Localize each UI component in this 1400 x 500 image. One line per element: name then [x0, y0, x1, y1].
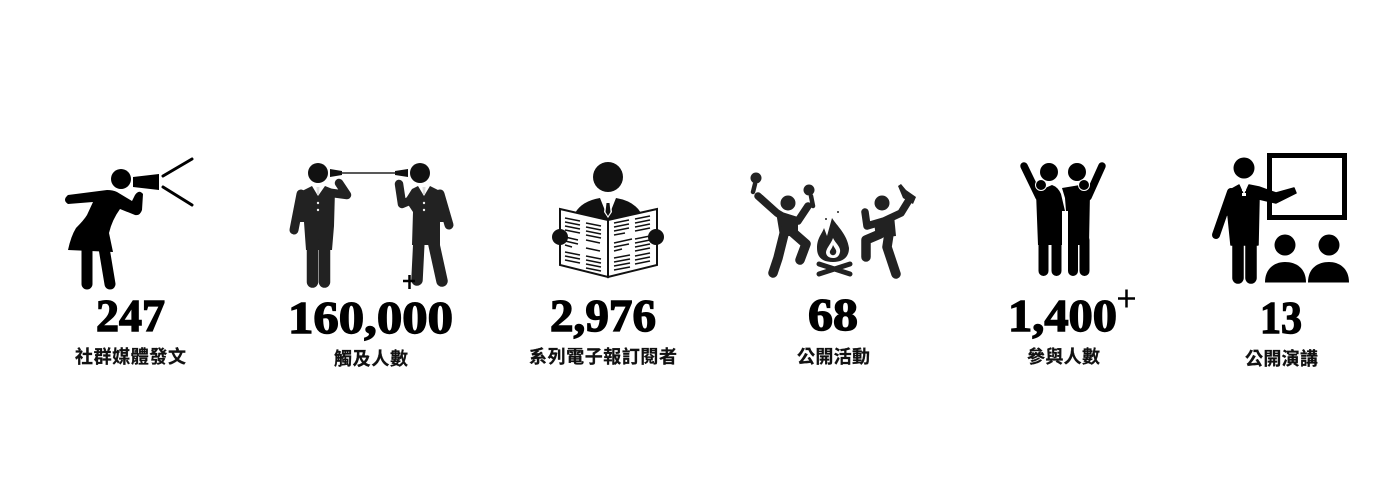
label: talks: 公開演講 [1245, 348, 1318, 369]
icon: two men with tin can phone [294, 163, 449, 289]
stat: social media posts [65, 159, 192, 367]
stat: reach [288, 163, 453, 369]
label: events: 公開活動 [797, 347, 870, 367]
number: 247: 247 [96, 290, 165, 341]
label: posts: 社群媒體發文 [75, 346, 186, 367]
icon: man reading newspaper [552, 162, 664, 277]
number: 13: 13 [1260, 292, 1302, 343]
icon: two people with raised arms [1024, 163, 1102, 271]
number: 68: 68 [808, 289, 858, 340]
icon: woman with megaphone [65, 159, 192, 284]
stat: public events [750, 172, 916, 367]
label: participants: 參與人數 [1027, 346, 1100, 367]
number: 160,000: 160,000 [288, 292, 453, 343]
stat: newsletter subscribers [529, 162, 677, 367]
stat: participants [1008, 163, 1135, 367]
label: reach: 觸及人數 [334, 349, 408, 369]
number: 1,400: 1,400 [1008, 290, 1117, 341]
icon: presenter with board and audience [1216, 156, 1349, 282]
label: subscribers: 系列電子報訂閱者 [529, 346, 677, 367]
icon: people dancing by campfire [750, 172, 916, 274]
plus sign [1118, 290, 1135, 308]
stat: public talks [1216, 156, 1349, 369]
number: 2,976: 2,976 [550, 290, 656, 341]
